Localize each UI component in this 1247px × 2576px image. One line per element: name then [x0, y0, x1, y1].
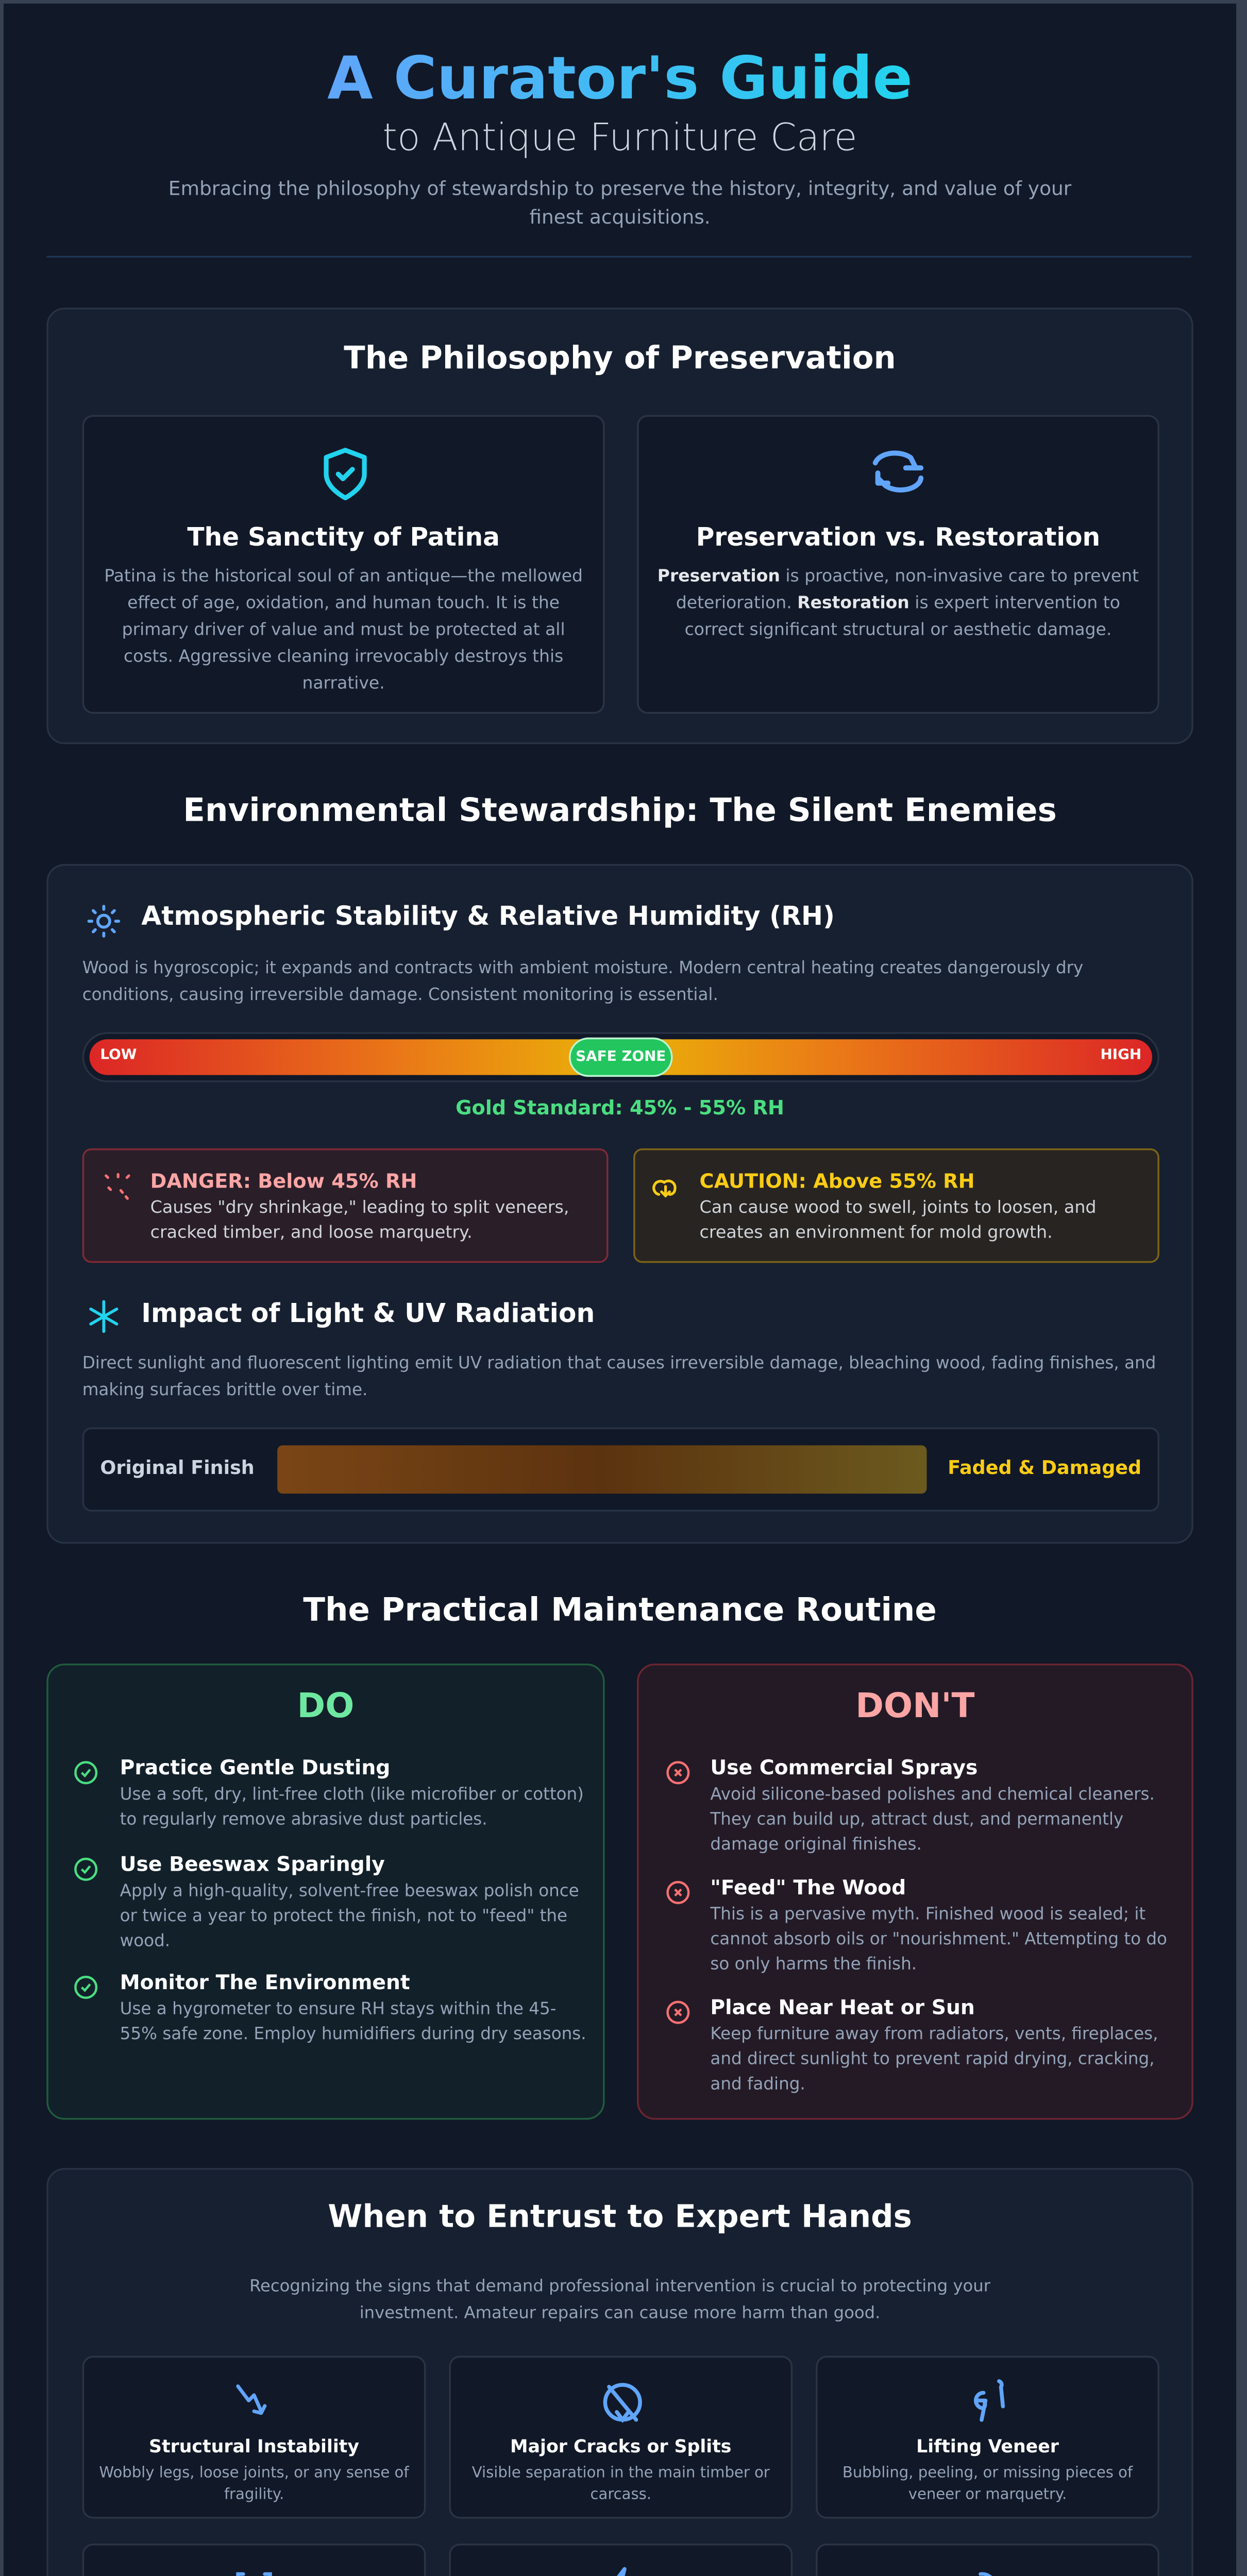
card: structural: Wobbly legs, loose joints, or any sense of fragility.: [99, 2463, 409, 2502]
chart: finish fade: [82, 1428, 1159, 1512]
text: experts intro: Recognizing the signs that demand professional intervention is crucial to protecting your investment. Amateur repairs can cause more harm than good.: [249, 2277, 990, 2324]
heading: experts: When to Entrust to Expert Hands: [328, 2200, 912, 2236]
heading: philosophy: The Philosophy of Preservation: [344, 342, 896, 378]
safe zone marker: SAFE ZONE: [576, 1048, 666, 1064]
callout: danger: DANGER: Below 45% RH: [150, 1170, 417, 1193]
card: structural: Structural Instability: [149, 2438, 359, 2458]
card: preservation vs restoration: [637, 415, 1159, 714]
panel: dont: [637, 1664, 1193, 2120]
card: veneer: Lifting Veneer: [916, 2438, 1059, 2458]
card: structural: [82, 2356, 426, 2519]
icon: crack: [105, 1173, 130, 1200]
subtitle: to Antique Furniture Care: [382, 116, 857, 159]
item: heat: Keep furniture away from radiators, vents, fireplaces, and direct sunlight to prevent rapid drying, cracking, and fading.: [710, 2025, 1158, 2095]
card: cracks: Visible separation in the main timber or carcass.: [472, 2463, 770, 2502]
item: beeswax: [74, 1853, 579, 1952]
heading: environmental: Environmental Stewardship: The Silent Enemies: [183, 792, 1057, 830]
text: humidity: Wood is hygroscopic; it expands and contracts with ambient moisture. Modern central heating creates dangerously dry conditions, causing irreversible damage. Consistent monitoring is essential.: [82, 959, 1083, 1005]
card: cracks: [449, 2356, 793, 2519]
item: monitor: [74, 1971, 586, 2044]
item: beeswax: Apply a high-quality, solvent-free beeswax polish once or twice a year to protect the finish, not to "feed" the wood.: [120, 1882, 579, 1952]
item: feed: This is a pervasive myth. Finished wood is sealed; it cannot absorb oils or "nourishment." Attempting to do so only harms the finish.: [710, 1905, 1167, 1975]
chart: humidity bar: HIGH: [1100, 1046, 1141, 1062]
chart: finish fade: Original Finish: [100, 1458, 255, 1479]
callout: caution: [633, 1148, 1159, 1263]
card: infestation: [816, 2544, 1159, 2576]
card: veneer: Bubbling, peeling, or missing pieces of veneer or marquetry.: [842, 2463, 1133, 2502]
heading: maintenance: The Practical Maintenance Routine: [303, 1592, 937, 1630]
card: cracks: Major Cracks or Splits: [510, 2438, 731, 2458]
text: patina: Patina is the historical soul of an antique—the mellowed effect of age, oxidation, and human touch. It is the primary driver of value and must be protected at all costs. Aggressive cleaning irrevocably destroys this narrative.: [104, 567, 583, 694]
item: dusting: Use a soft, dry, lint-free cloth (like microfiber or cotton) to regularly remove abrasive dust particles.: [120, 1785, 584, 1830]
icon: cycle: [873, 450, 923, 493]
item: monitor: Use a hygrometer to ensure RH stays within the 45-55% safe zone. Employ humidifiers during dry seasons.: [120, 2000, 586, 2044]
safe zone marker: [569, 1038, 672, 1077]
panel: do: DO: [297, 1687, 354, 1726]
item: sprays: Use Commercial Sprays: [710, 1757, 978, 1780]
heading: humidity: Atmospheric Stability & Relative Humidity (RH): [141, 903, 835, 932]
chart: finish fade: Faded & Damaged: [948, 1458, 1141, 1479]
panel: philosophy: [46, 308, 1193, 744]
item: sprays: Avoid silicone-based polishes and chemical cleaners. They can build up, attract dust, and permanently damage original finishes.: [710, 1785, 1155, 1855]
heading: uv: Impact of Light & UV Radiation: [141, 1300, 595, 1329]
item: beeswax: Use Beeswax Sparingly: [120, 1853, 385, 1876]
item: monitor: Monitor The Environment: [120, 1971, 410, 1994]
icon: sun: [88, 905, 121, 938]
item: heat: Place Near Heat or Sun: [710, 1996, 975, 2020]
icon: shield: [324, 448, 367, 500]
callout: danger: [82, 1148, 608, 1263]
tagline: Embracing the philosophy of stewardship to preserve the history, integrity, and value of your finest acquisitions.: [168, 177, 1071, 229]
card: finish damage: [82, 2544, 426, 2576]
callout: caution: Can cause wood to swell, joints to loosen, and creates an environment for mold growth.: [700, 1198, 1097, 1243]
chart: humidity bar: LOW: [100, 1046, 137, 1062]
icon: uv: [89, 1300, 119, 1333]
item: heat: [666, 1996, 1158, 2095]
item: feed: [666, 1876, 1167, 1975]
card: veneer: [816, 2356, 1159, 2519]
title: A Curator's Guide: [327, 43, 913, 113]
item: sprays: [666, 1757, 1155, 1855]
panel: experts: [46, 2168, 1193, 2576]
text: preservation: Preservation is proactive, non-invasive care to prevent deterioration. Restoration is expert intervention to correct significant structural or aesthetic damage.: [658, 567, 1139, 640]
card: patina: [82, 415, 605, 714]
item: dusting: [74, 1757, 584, 1830]
item: feed: "Feed" The Wood: [710, 1876, 906, 1900]
panel: dont: DON'T: [855, 1687, 975, 1726]
card: ormolu: [449, 2544, 793, 2576]
text: uv: Direct sunlight and fluorescent lighting emit UV radiation that causes irreversible damage, bleaching wood, fading finishes, and making surfaces brittle over time.: [82, 1354, 1156, 1400]
label: gold standard: Gold Standard: 45% - 55% RH: [456, 1096, 784, 1120]
item: dusting: Practice Gentle Dusting: [120, 1757, 390, 1780]
heading: preservation: Preservation vs. Restoration: [696, 524, 1100, 553]
panel: do: [46, 1664, 605, 2120]
panel: environment: [46, 864, 1193, 1544]
chart: humidity bar: [82, 1032, 1159, 1082]
callout: caution: CAUTION: Above 55% RH: [700, 1170, 975, 1193]
callout: danger: Causes "dry shrinkage," leading to split veneers, cracked timber, and loose marquetry.: [150, 1198, 569, 1243]
icon: cloud drop: [652, 1180, 677, 1198]
heading: patina: The Sanctity of Patina: [187, 524, 500, 553]
